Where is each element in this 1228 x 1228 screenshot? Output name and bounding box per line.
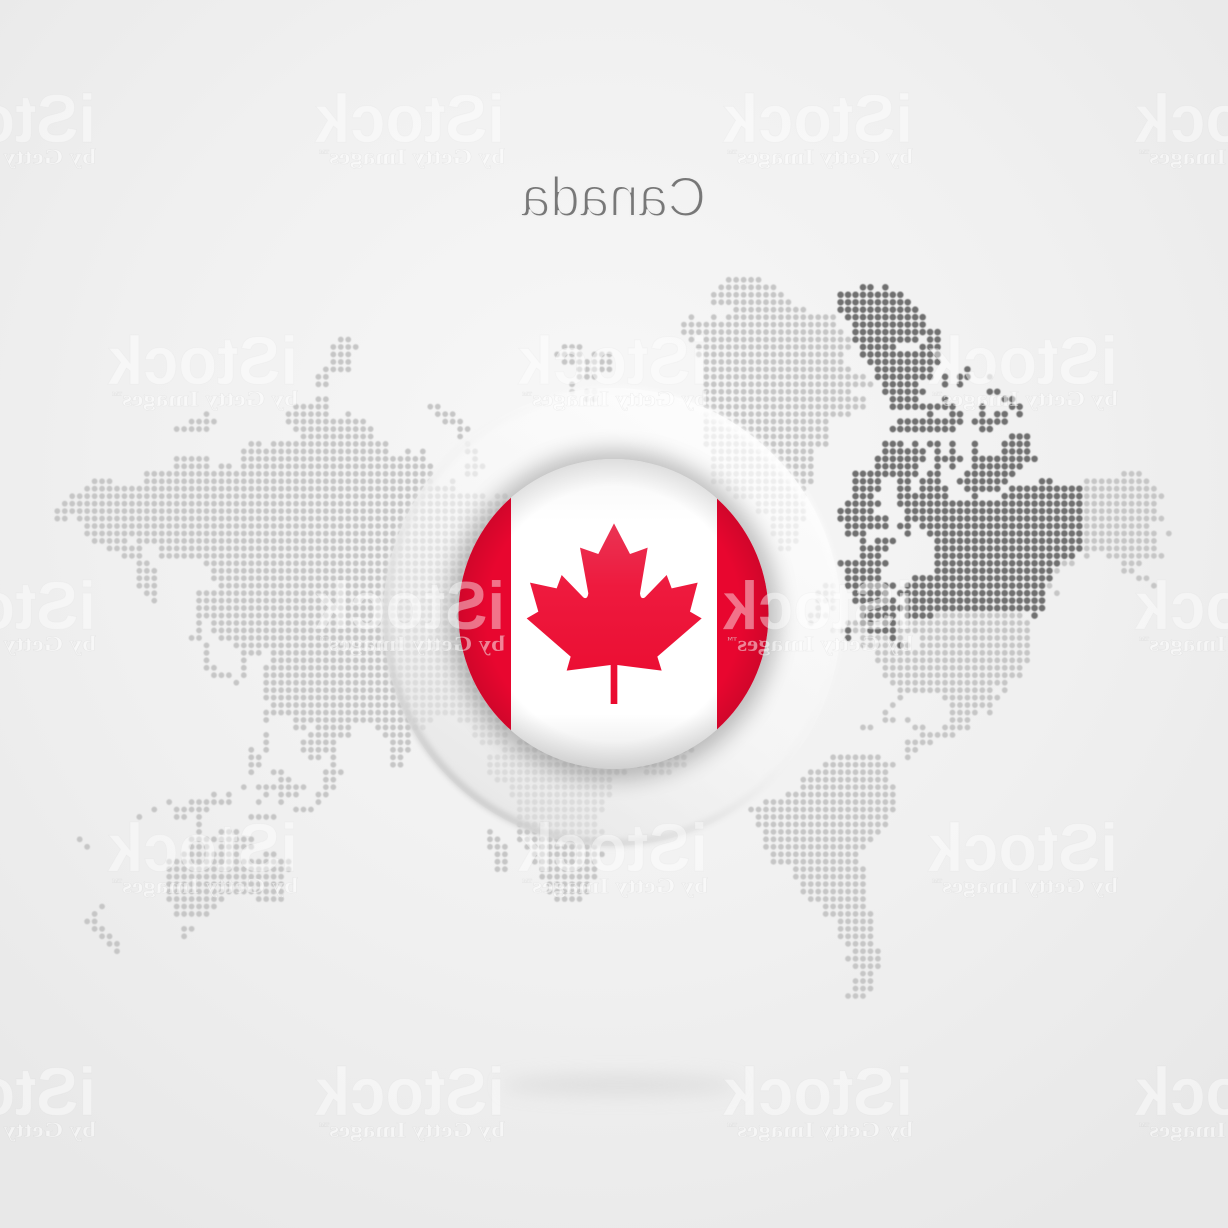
watermark row 2: by Getty Images [144,386,298,411]
watermark row 2: iStock [928,323,1118,399]
watermark row 2: ™ [932,390,942,400]
watermark row 5: ™ [727,1121,737,1131]
watermark row 4: iStock [928,810,1118,886]
watermark row 3: ™ [727,635,737,645]
badge shadow [448,450,778,780]
watermark row 4: ™ [112,877,122,887]
map: Canada highlighted [841,287,1080,645]
badge disc [458,459,769,770]
watermark row 4 [108,810,1118,898]
watermark row 5: iStock [315,1054,505,1130]
watermark row 2: by Getty Images [964,386,1118,411]
map: South America [751,757,894,996]
watermark row 1: by Getty Images [759,144,913,169]
watermark row 1: ™ [1139,148,1149,158]
floor shadow [502,1075,738,1095]
watermark row 1 [0,81,1228,169]
watermark row 1: ™ [319,148,329,158]
dotted world map [57,280,1170,996]
left red stripe [458,498,511,730]
map: Eurasia [57,340,521,832]
watermark row 5 [0,1054,1228,1142]
watermark row 5: by Getty Images [351,1117,505,1142]
watermark row 2: iStock [108,323,298,399]
right red stripe [717,498,768,730]
watermark row 3: ™ [1139,635,1149,645]
map: British Isles [557,347,610,399]
watermark row 2: ™ [112,390,122,400]
watermark row 3: ™ [319,635,329,645]
watermark row 5: ™ [319,1121,329,1131]
map: Alaska [990,377,1170,593]
map: Australia and Pacific islands [80,839,289,951]
watermark row 1: iStock [315,81,505,157]
watermark row 4: ™ [932,877,942,887]
title: Canada [520,165,706,228]
watermark row 2 [108,323,1118,411]
watermark row 3: by Getty Images [351,631,505,656]
watermark row 4: ™ [522,877,532,887]
watermark row 3: iStock [723,568,913,644]
map: United States and Central America [811,586,1028,757]
map: Africa and Madagascar [483,742,692,899]
watermark row 4: iStock [108,810,298,886]
maple leaf [527,523,702,704]
watermark row 1: iStock [723,81,913,157]
watermark row 4: by Getty Images [144,873,298,898]
watermark row 4: by Getty Images [964,873,1118,898]
watermark row 5: iStock [723,1054,913,1130]
watermark row 3 [0,568,1228,656]
watermark row 5: by Getty Images [759,1117,913,1142]
watermark row 2: by Getty Images [554,386,708,411]
flag badge [448,450,778,780]
watermark row 4: by Getty Images [554,873,708,898]
map: Greenland [684,280,871,548]
watermark row 3: iStock [315,568,505,644]
glass lens ring [383,388,841,846]
watermark row 2: iStock [518,323,708,399]
watermark row 4: iStock [518,810,708,886]
watermark row 1: ™ [727,148,737,158]
watermark row 2: ™ [522,390,532,400]
watermark row 5: ™ [1139,1121,1149,1131]
watermark row 3: by Getty Images [759,631,913,656]
watermark row 1: by Getty Images [351,144,505,169]
